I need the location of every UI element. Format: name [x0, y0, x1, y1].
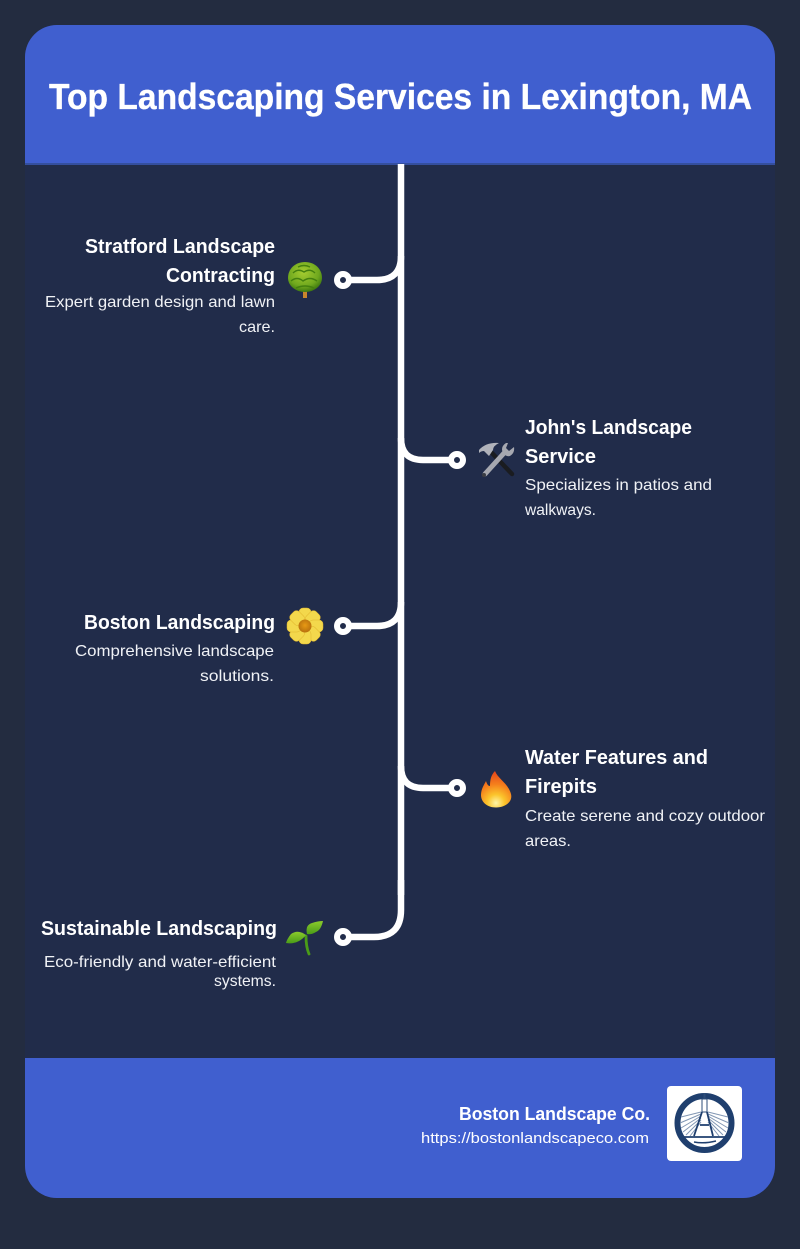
item: Sustainable Landscaping: Sustainable Landscaping [41, 918, 277, 940]
icon: tree [288, 262, 322, 298]
title: Top Landscaping Services in Lexington, MA [49, 76, 752, 117]
footer company name: Boston Landscape Co. [459, 1104, 650, 1124]
item: Sustainable Landscaping: Eco-friendly and water-efficient [44, 954, 277, 971]
item: Water Features and Firepits: Create serene and cozy outdoor [525, 808, 766, 825]
item: Sustainable Landscaping [41, 918, 277, 990]
item: Water Features and Firepits: areas. [525, 833, 571, 850]
timeline connectors [343, 164, 457, 937]
item: John's Landscape Service: John's Landscape [525, 417, 692, 439]
footer band [25, 1058, 775, 1198]
icon: hammer and wrench [479, 443, 514, 477]
item: Boston Landscaping [75, 612, 275, 685]
icon: flower [287, 608, 323, 644]
item: Stratford Landscape Contracting: care. [239, 319, 275, 336]
item: Water Features and Firepits: Firepits [525, 776, 597, 798]
item: Stratford Landscape Contracting: Contracting [166, 265, 275, 287]
item: Stratford Landscape Contracting [45, 236, 275, 336]
item: Stratford Landscape Contracting: Stratford Landscape [85, 236, 275, 258]
footer url: https://bostonlandscapeco.com [421, 1130, 649, 1147]
icon: seedling [286, 921, 323, 954]
item: John's Landscape Service: Specializes in patios and [525, 477, 712, 494]
item: Stratford Landscape Contracting: Expert garden design and lawn [45, 294, 275, 311]
item: John's Landscape Service [524, 417, 712, 519]
item: Boston Landscaping: Boston Landscaping [84, 612, 275, 634]
item: Boston Landscaping: solutions. [200, 668, 274, 685]
header band [25, 25, 775, 164]
item: Water Features and Firepits: Water Features and [525, 747, 708, 769]
logo: bridge badge [667, 1086, 742, 1161]
timeline node markers [337, 274, 463, 943]
icon: fire [481, 771, 511, 808]
item: Sustainable Landscaping: systems. [214, 973, 276, 990]
item: Boston Landscaping: Comprehensive landscape [75, 643, 274, 660]
item: Water Features and Firepits [525, 747, 766, 850]
item: John's Landscape Service: Service [525, 446, 596, 468]
item: John's Landscape Service: walkways. [524, 502, 596, 519]
